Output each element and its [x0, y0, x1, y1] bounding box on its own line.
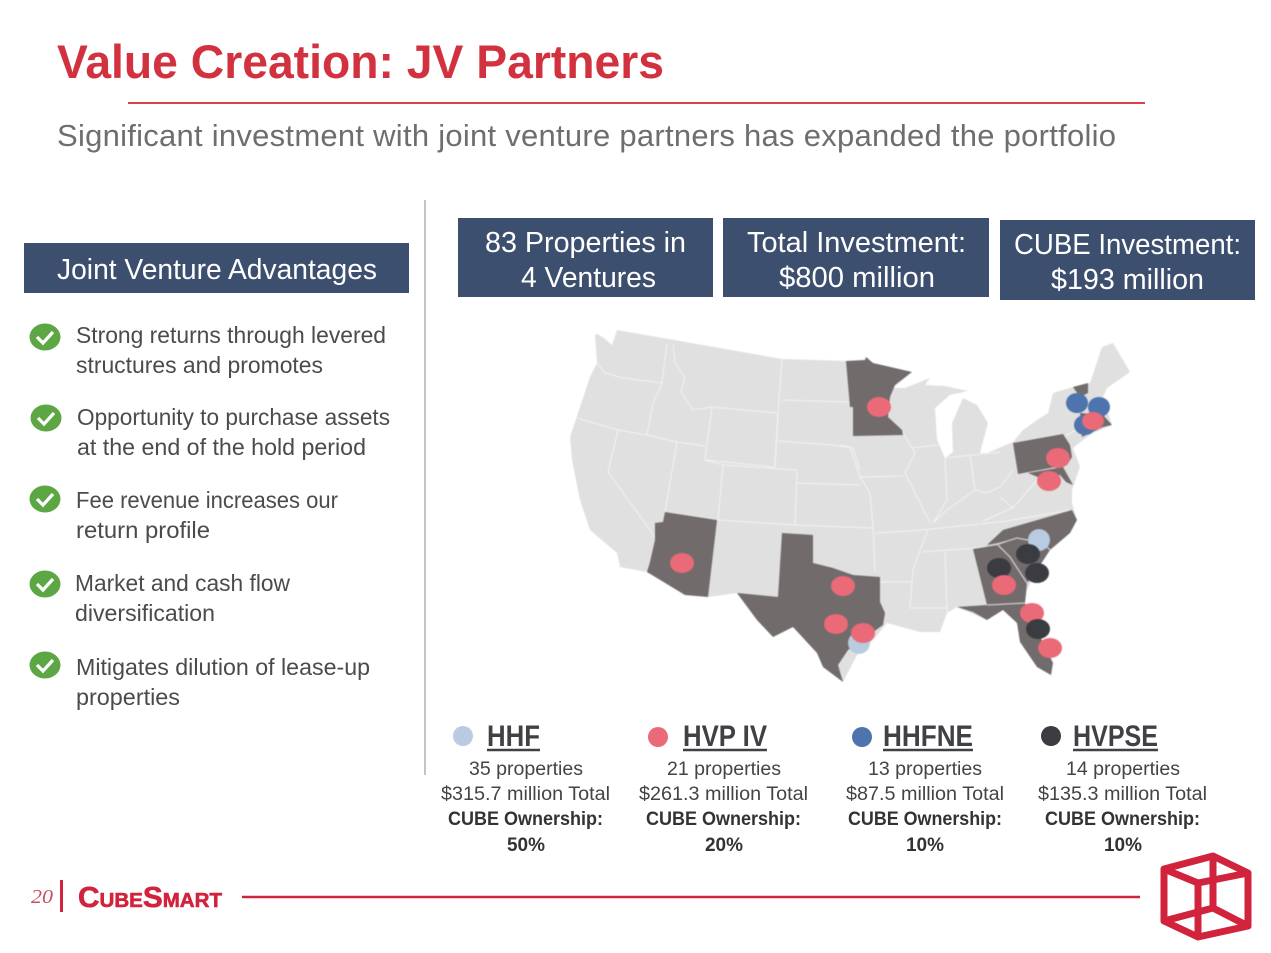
- advantage: diversification: diversification: [75, 600, 215, 626]
- legend: HHF: HHF: [487, 720, 540, 753]
- advantage: fee revenue: Fee revenue increases our: [76, 487, 338, 513]
- legend: HHF: CUBE Ownership:: [448, 809, 603, 830]
- advantage: strong returns: [30, 322, 386, 378]
- map base: [570, 330, 1130, 682]
- legend: HVPSE: [1038, 720, 1207, 856]
- advantage: diversification: Market and cash flow: [75, 570, 290, 596]
- legend: HHF: [441, 720, 610, 856]
- legend: HVPSE: $135.3 million Total: [1038, 784, 1207, 805]
- legend: HVP IV: 21 properties: [667, 759, 781, 780]
- stat box: CUBE investment: [1000, 220, 1255, 300]
- subtitle: Significant investment with joint venture partners has expanded the portfolio: [57, 118, 1116, 153]
- legend: HVP IV: 20%: [705, 835, 743, 856]
- legend: HHF: 50%: [507, 835, 545, 856]
- legend: HHF: $315.7 million Total: [441, 784, 610, 805]
- legend: HVP IV: CUBE Ownership:: [646, 809, 801, 830]
- legend: HVP IV: HVP IV: [683, 720, 767, 753]
- stat box: CUBE investment: $193 million: [1051, 264, 1204, 296]
- stat box: total investment: Total Investment:: [747, 227, 966, 259]
- advantage: opportunity to purchase: Opportunity to purchase assets: [77, 404, 390, 430]
- page number: 20: [31, 886, 53, 908]
- legend: HHFNE: CUBE Ownership:: [848, 809, 1002, 830]
- legend: HVP IV: [639, 720, 808, 856]
- advantage: strong returns: structures and promotes: [76, 352, 323, 378]
- icon: red cube: [1164, 856, 1248, 937]
- advantage: diversification: [30, 570, 290, 626]
- advantage: mitigates dilution: Mitigates dilution of lease-up: [76, 654, 370, 680]
- advantage: opportunity to purchase: at the end of the hold period: [77, 434, 366, 460]
- legend: HHFNE: [846, 720, 1004, 856]
- advantage: opportunity to purchase: [30, 404, 390, 460]
- stat box: CUBE investment: CUBE Investment:: [1014, 229, 1241, 261]
- stat box: properties: 83 Properties in: [485, 227, 686, 259]
- stat box: total investment: [723, 218, 989, 297]
- legend dots on map: [670, 393, 1110, 658]
- legend: HVPSE: 10%: [1104, 835, 1142, 856]
- legend: HHF: 35 properties: [469, 759, 583, 780]
- heading: joint venture advantages: [24, 243, 409, 293]
- advantage: strong returns: Strong returns through levered: [76, 322, 386, 348]
- legend: HVP IV: $261.3 million Total: [639, 784, 808, 805]
- advantage: fee revenue: return profile: [76, 517, 210, 543]
- highlighted states: [647, 357, 1112, 682]
- legend: HVPSE: 14 properties: [1066, 759, 1180, 780]
- panel: joint venture advantages: [24, 243, 409, 710]
- map: United States: [570, 330, 1130, 682]
- legend: HHFNE: 13 properties: [868, 759, 982, 780]
- legend: HVPSE: HVPSE: [1073, 720, 1158, 753]
- advantage: mitigates dilution: properties: [76, 684, 180, 710]
- advantage: fee revenue: [30, 486, 338, 543]
- heading: joint venture advantages: Joint Venture Advantages: [57, 254, 377, 286]
- stat box: properties: 4 Ventures: [521, 262, 656, 294]
- advantage: mitigates dilution: [30, 652, 370, 710]
- logo: CubeSmart: CUBESMART: [78, 882, 222, 914]
- legend: HHFNE: 10%: [906, 835, 944, 856]
- stat box: total investment: $800 million: [779, 262, 935, 294]
- legend: HHFNE: HHFNE: [883, 720, 973, 753]
- stat box: properties: [458, 218, 713, 297]
- legend: HHFNE: $87.5 million Total: [846, 784, 1004, 805]
- legend: HVPSE: CUBE Ownership:: [1045, 809, 1200, 830]
- title: Value Creation: JV Partners: [57, 35, 664, 88]
